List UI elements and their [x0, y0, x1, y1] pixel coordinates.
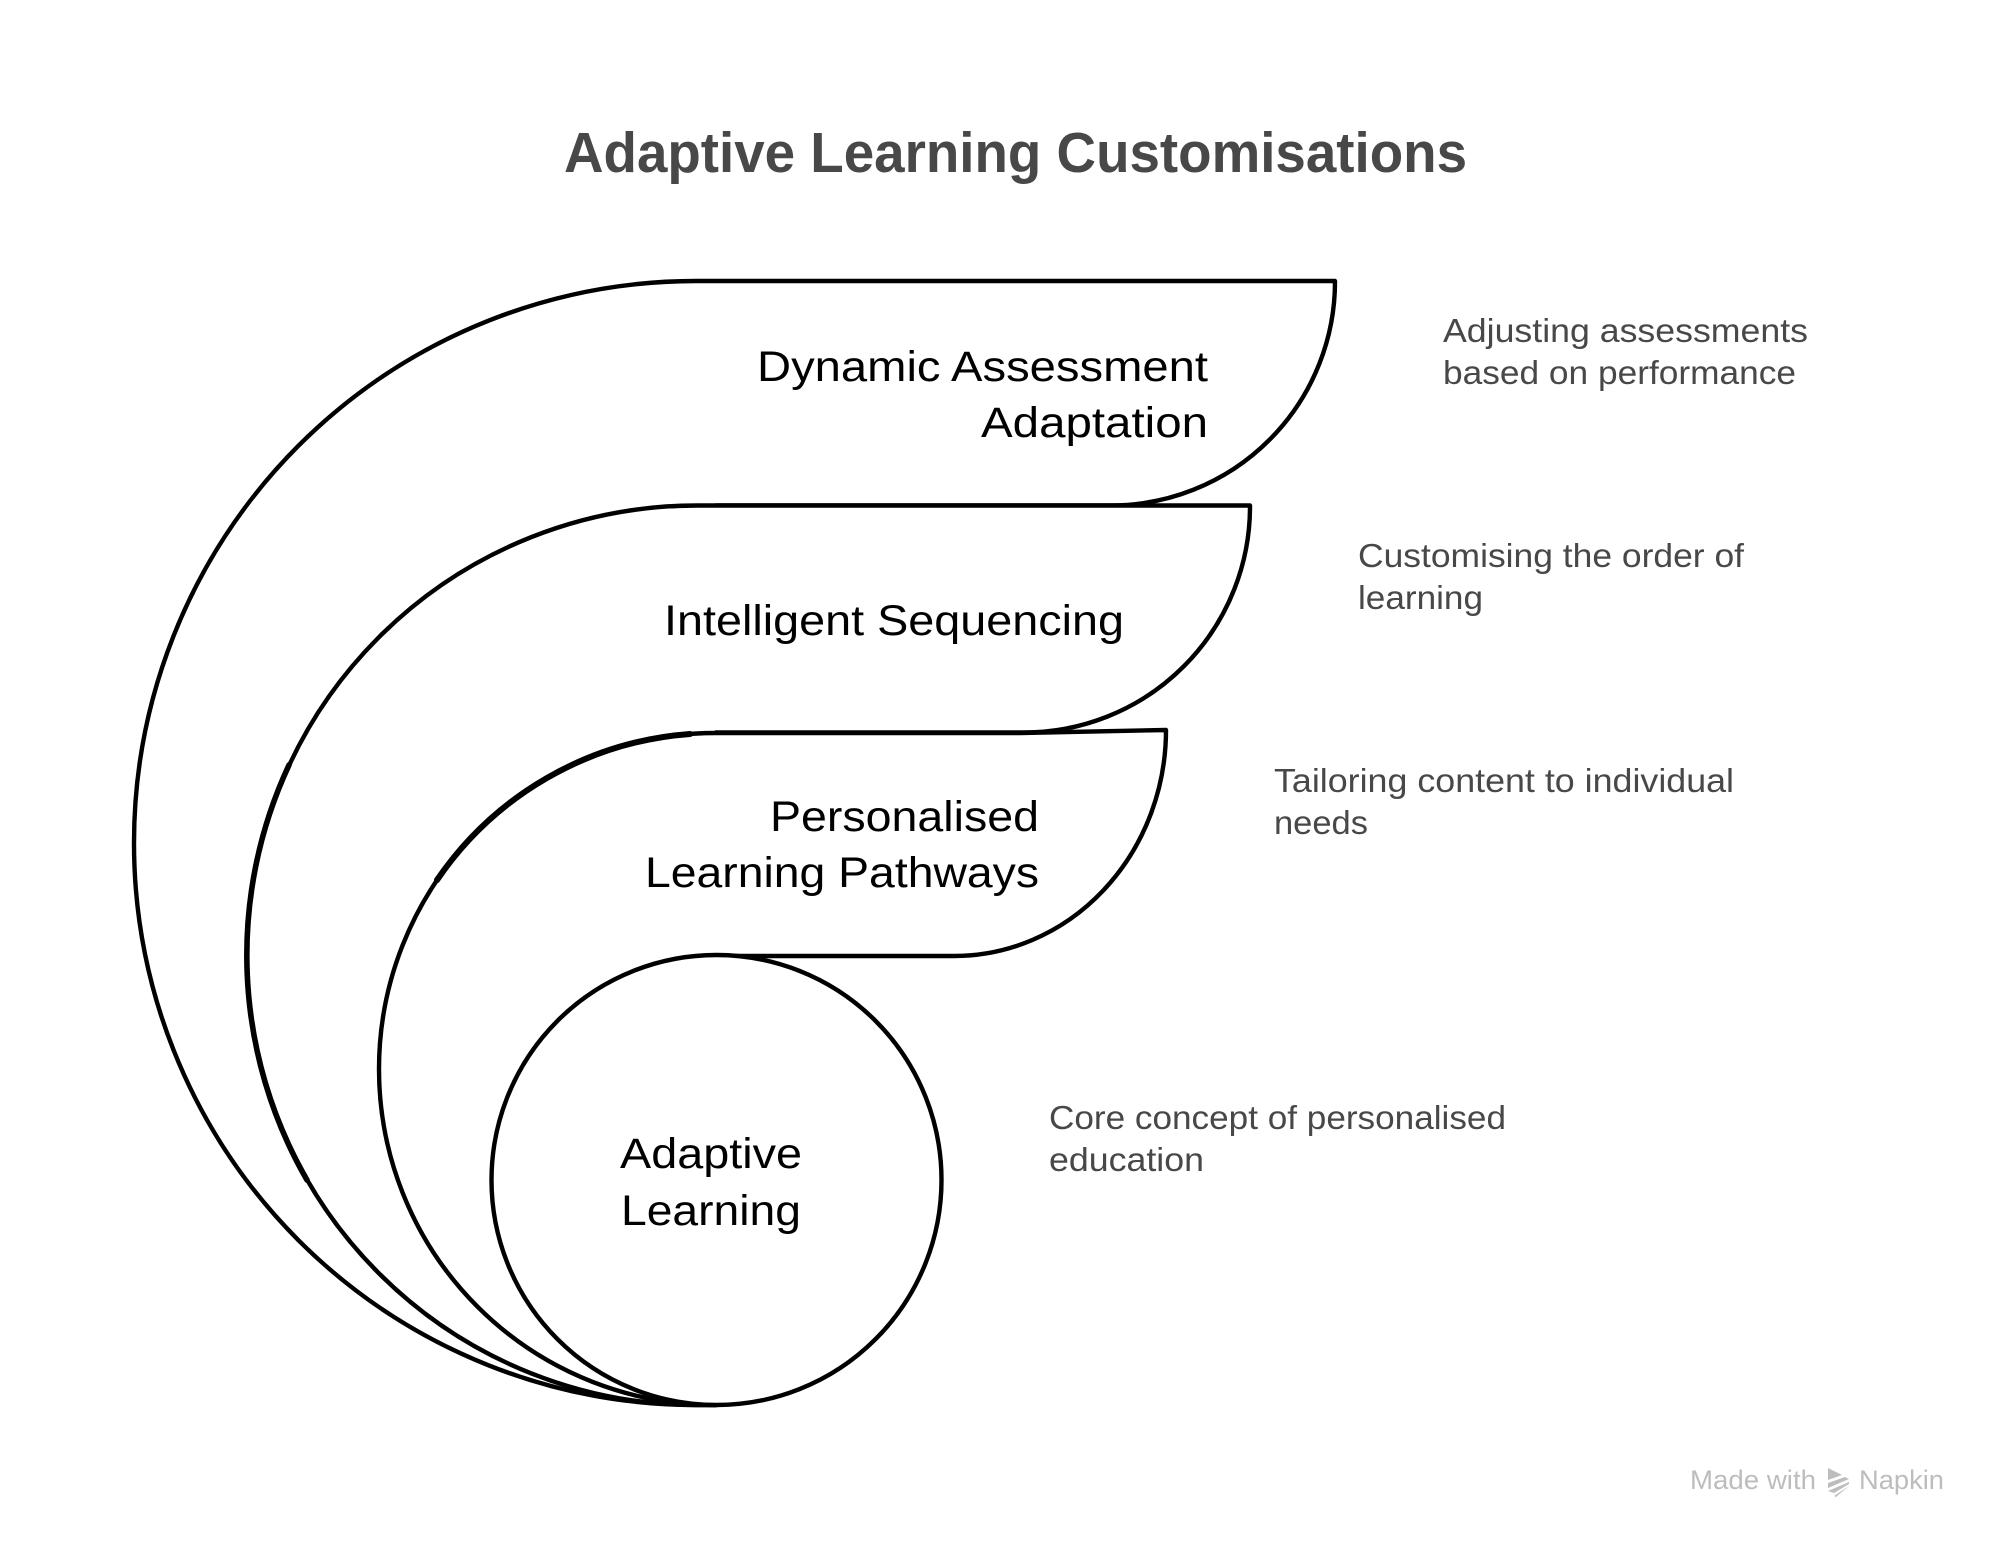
label: Personalised Learning Pathways: Personalised	[770, 793, 1039, 841]
title: Adaptive Learning Customisations	[564, 121, 1467, 185]
description: Adaptive Learning	[1049, 1099, 1506, 1178]
description: Personalised Learning Pathways: Tailoring content to individual	[1274, 762, 1734, 799]
core circle: Adaptive Learning	[492, 955, 942, 1405]
label: Dynamic Assessment Adaptation: Adaptation	[981, 399, 1208, 447]
description: Dynamic Assessment Adaptation	[1443, 312, 1808, 391]
label: Dynamic Assessment Adaptation: Dynamic Assessment	[757, 343, 1208, 391]
description: Adaptive Learning: Core concept of personalised	[1049, 1099, 1506, 1136]
label: Adaptive Learning	[620, 1130, 802, 1235]
watermark: Made with Napkin: Napkin	[1859, 1465, 1944, 1495]
layer shape: Dynamic Assessment Adaptation	[134, 281, 1335, 1405]
label: Personalised Learning Pathways	[645, 793, 1039, 897]
layer shape: Intelligent Sequencing	[247, 506, 1250, 1405]
description: Adaptive Learning: education	[1049, 1141, 1204, 1178]
label: Adaptive Learning: Adaptive	[620, 1130, 802, 1178]
watermark: Made with Napkin	[1690, 1465, 1944, 1497]
label: Intelligent Sequencing: Intelligent Sequencing	[664, 597, 1124, 645]
description: Personalised Learning Pathways: needs	[1274, 804, 1368, 841]
description: Intelligent Sequencing: Customising the order of	[1358, 537, 1745, 574]
description: Dynamic Assessment Adaptation: Adjusting assessments	[1443, 312, 1808, 349]
label: Dynamic Assessment Adaptation	[757, 343, 1208, 447]
description: Personalised Learning Pathways	[1274, 762, 1734, 841]
description: Intelligent Sequencing	[1358, 537, 1745, 616]
description: Dynamic Assessment Adaptation: based on performance	[1443, 354, 1796, 391]
label: Personalised Learning Pathways: Learning Pathways	[645, 849, 1039, 897]
layer shape: Personalised Learning Pathways	[379, 730, 1166, 1405]
label: Adaptive Learning: Learning	[621, 1187, 801, 1235]
watermark: Made with Napkin: Made with	[1690, 1465, 1816, 1495]
icon: Napkin logo	[1828, 1468, 1849, 1497]
description: Intelligent Sequencing: learning	[1358, 579, 1483, 616]
